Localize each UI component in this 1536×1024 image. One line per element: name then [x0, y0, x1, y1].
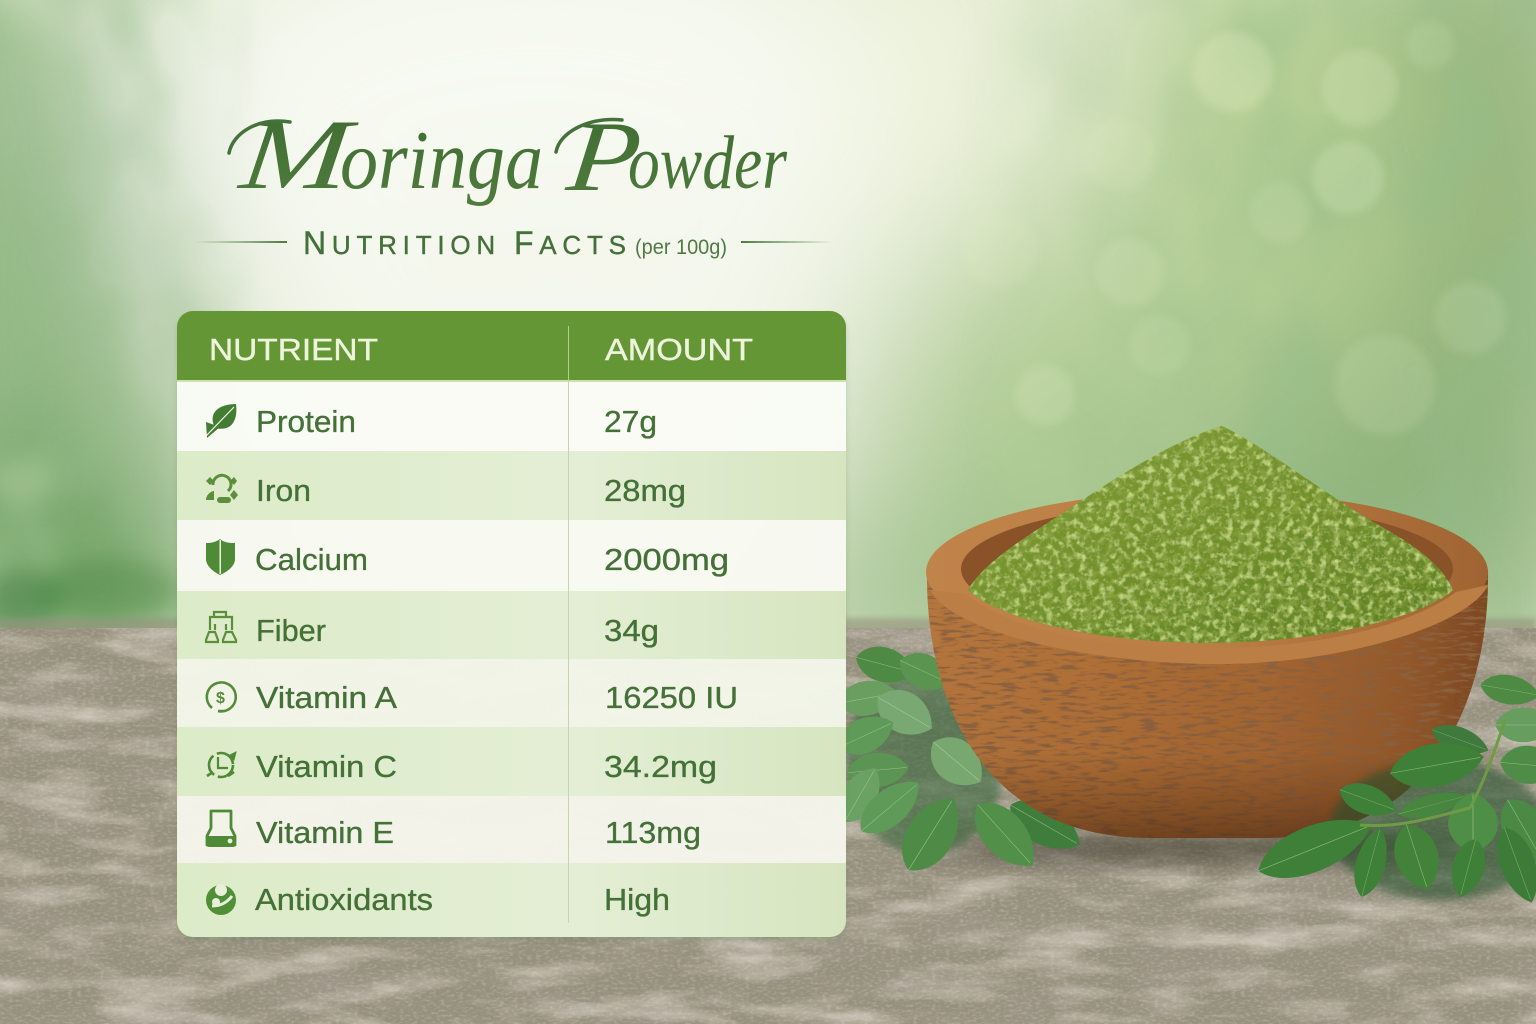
icon: shield — [206, 539, 235, 575]
row: Vitamin C: Vitamin C — [256, 749, 397, 784]
row: Fiber: 34g — [604, 613, 659, 648]
row: Calcium: 2000mg — [604, 542, 729, 577]
wooden bowl — [920, 426, 1495, 845]
icon: antioxidant circle — [206, 884, 236, 915]
row: Vitamin C: 34.2mg — [604, 749, 717, 784]
leaves behind bowl: left cluster — [830, 641, 1090, 882]
title — [229, 99, 787, 212]
row: Antioxidants: High — [604, 882, 670, 917]
row: Iron — [206, 473, 686, 508]
title: owder — [628, 121, 787, 205]
row: Antioxidants — [206, 882, 670, 917]
row: Protein: Protein — [256, 404, 356, 439]
icon: iron figure — [206, 475, 238, 503]
row: Fiber — [206, 612, 659, 648]
row: Calcium: Calcium — [255, 542, 368, 577]
title: M — [233, 99, 362, 210]
foliage shapes left — [0, 458, 180, 630]
row: Calcium — [206, 539, 729, 577]
nutrition table panel — [177, 311, 846, 941]
row: Iron: Iron — [256, 473, 311, 508]
row: Vitamin E — [206, 811, 701, 850]
subtitle — [195, 225, 833, 261]
row: Vitamin A: Vitamin A — [256, 680, 397, 715]
leaves in front: right cluster — [1250, 671, 1536, 908]
row: Fiber: Fiber — [256, 613, 326, 648]
row: Vitamin A — [207, 680, 738, 715]
row: Antioxidants: Antioxidants — [255, 882, 433, 917]
icon: flask — [206, 811, 236, 847]
foliage mottling on the sides — [0, 0, 1536, 640]
row: Vitamin A: 16250 IU — [605, 680, 738, 715]
row: Vitamin E: 113mg — [605, 815, 701, 850]
subtitle: NUTRITION FACTS — [303, 225, 626, 261]
icon: leaf — [206, 404, 236, 438]
row: Vitamin E: Vitamin E — [256, 815, 394, 850]
table header: NUTRIENT — [209, 332, 378, 367]
table header: AMOUNT — [605, 332, 753, 367]
table header — [177, 311, 846, 382]
row: Protein: 27g — [604, 404, 657, 439]
bokeh lights — [962, 21, 1506, 435]
row: Protein — [206, 404, 657, 439]
row: Vitamin C — [207, 749, 717, 784]
icon: citrus cycle — [207, 752, 236, 777]
subtitle: (per 100g) — [635, 236, 727, 259]
title: P — [562, 101, 646, 212]
title: oringa — [340, 114, 543, 207]
icon: dollar circle: $ — [216, 690, 225, 707]
icon: fiber — [206, 612, 236, 642]
powder pile — [968, 426, 1453, 643]
row: Iron: 28mg — [604, 473, 686, 508]
icon: dollar circle — [207, 682, 236, 711]
stone table surface — [0, 618, 1536, 1024]
